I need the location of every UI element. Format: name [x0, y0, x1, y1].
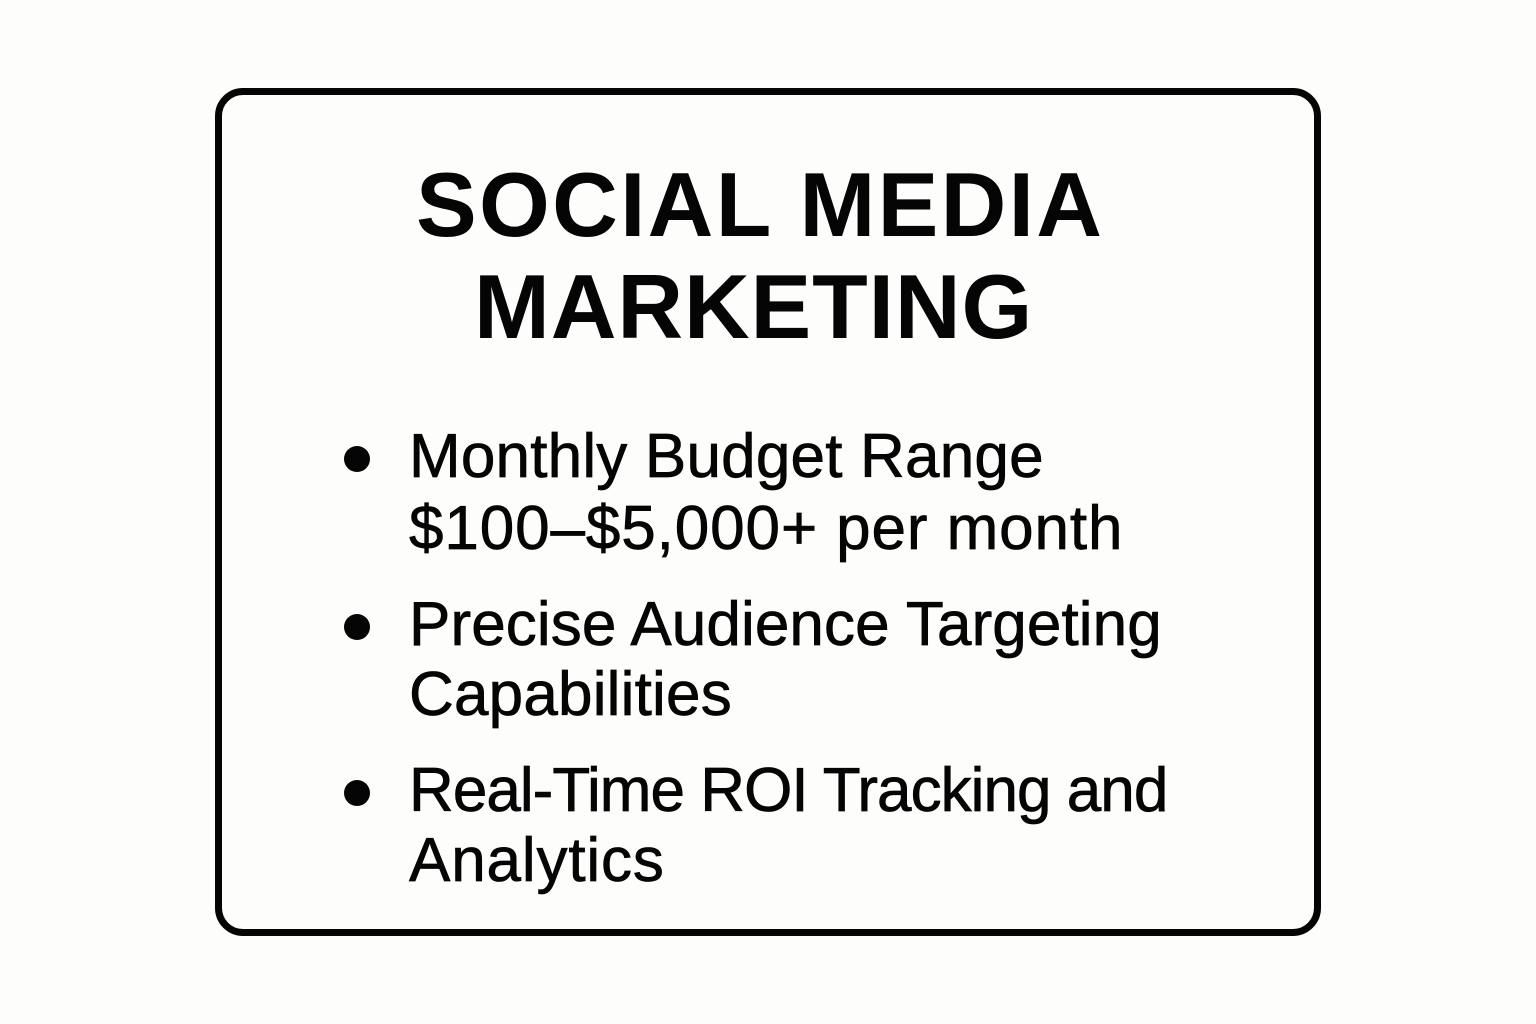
panel: social media marketing card [215, 88, 1321, 936]
bullet: audience targeting: Capabilities [409, 660, 732, 729]
bullet: ROI tracking: Real-Time ROI Tracking and [409, 756, 1167, 825]
bullet: ROI tracking: Analytics [409, 826, 665, 895]
bullet: audience targeting: Precise Audience Targeting [409, 590, 1162, 659]
title: SOCIAL MEDIA [416, 155, 1104, 256]
bullet: monthly budget: Monthly Budget Range [409, 422, 1044, 491]
bullet: audience targeting [344, 590, 1162, 729]
bullet: ROI tracking [344, 756, 1167, 895]
bullet: monthly budget [344, 422, 1123, 563]
title [416, 155, 1104, 358]
title: MARKETING [474, 257, 1033, 358]
bullet: monthly budget: $100–$5,000+ per month [409, 494, 1123, 563]
